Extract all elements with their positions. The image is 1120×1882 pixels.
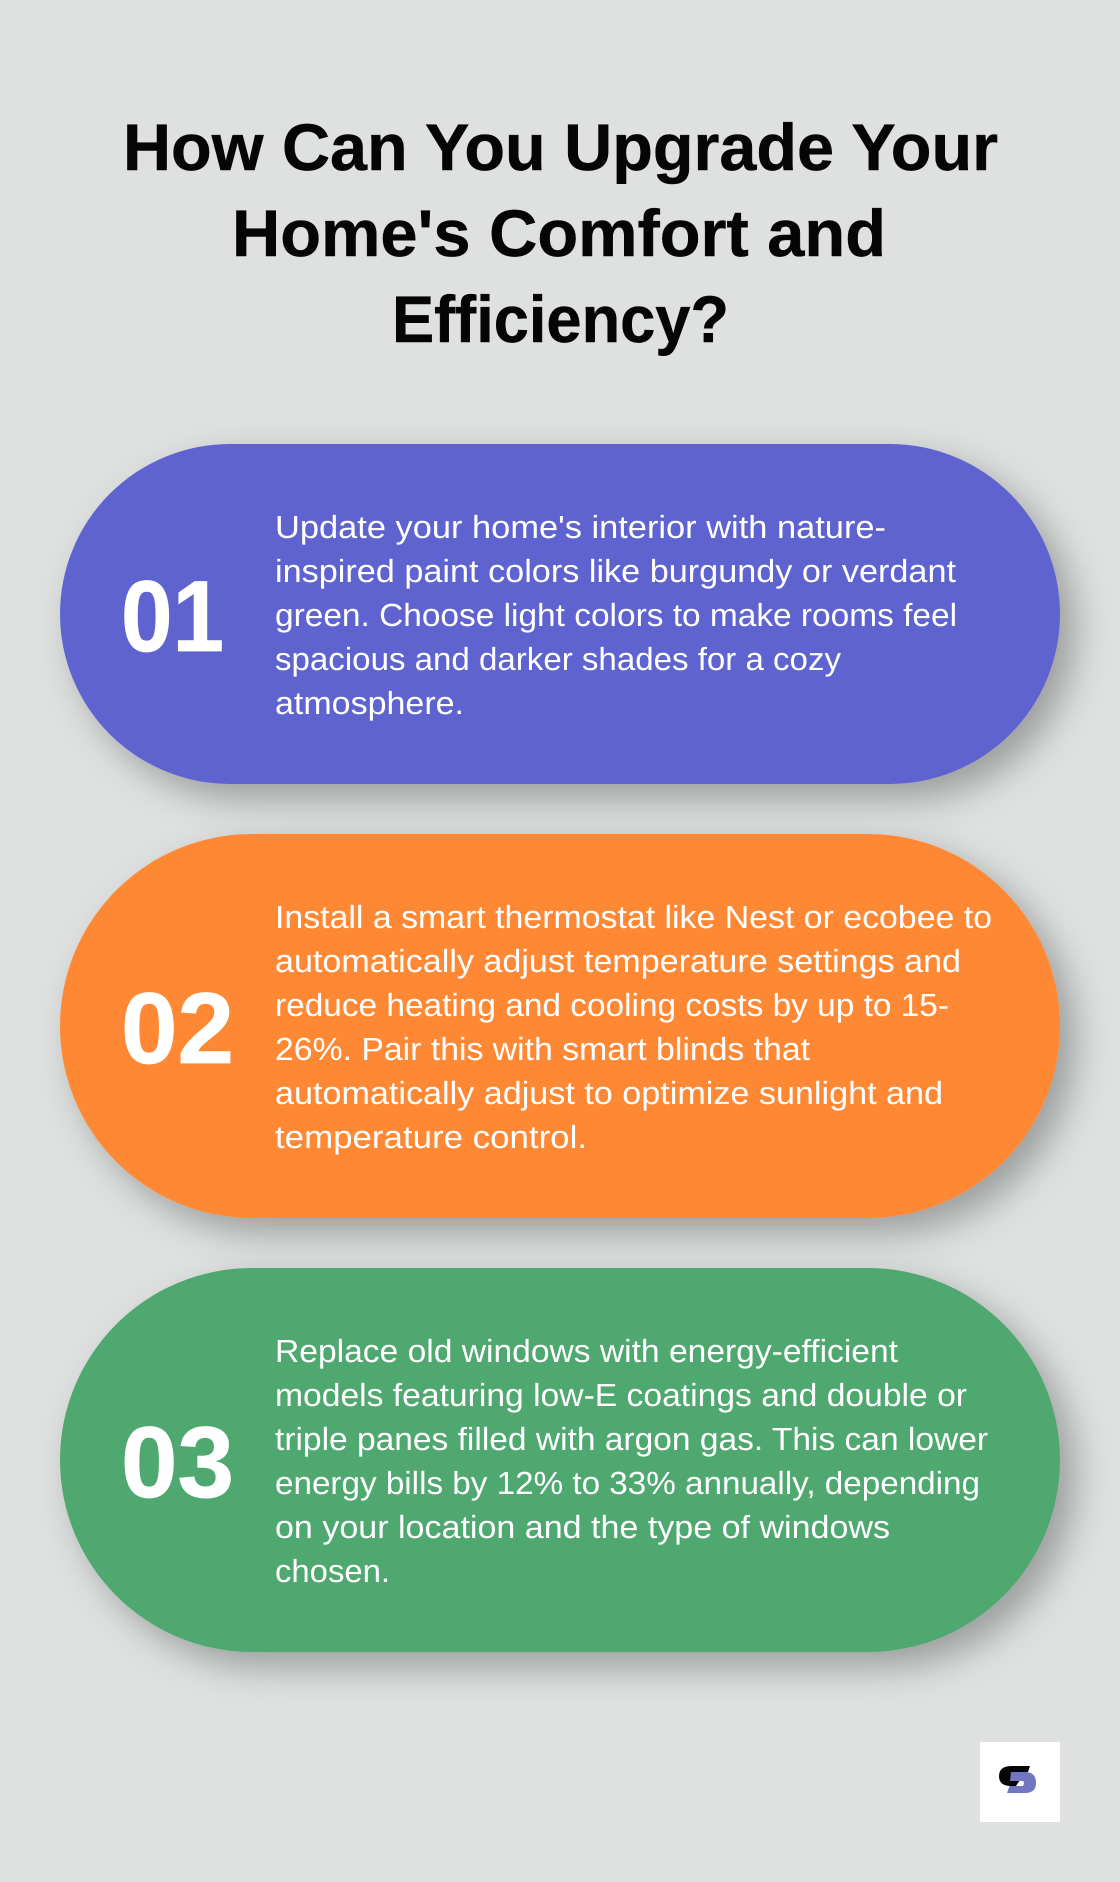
icon: logo badge (980, 1742, 1060, 1822)
body text: automatically adjust temperature settings and (275, 943, 961, 979)
body text: models featuring low-E coatings and double or (275, 1377, 967, 1413)
body text (275, 899, 992, 1155)
step number 01: 01 (121, 561, 224, 673)
body text: Install a smart thermostat like Nest or ecobee to (275, 899, 992, 935)
pill background: orange (60, 834, 1060, 1218)
body text: green. Choose light colors to make rooms feel (275, 597, 957, 633)
body text (275, 1333, 988, 1589)
body text: automatically adjust to optimize sunlight and (275, 1075, 943, 1111)
body text: temperature control. (275, 1119, 587, 1155)
step number 03: 03 (121, 1407, 234, 1519)
body text: on your location and the type of windows (275, 1509, 890, 1545)
title: How Can You Upgrade Your (123, 110, 998, 184)
panel: step 01 paint colors (60, 444, 1060, 784)
panel: step 02 smart thermostat (60, 834, 1060, 1218)
body text: atmosphere. (275, 685, 464, 721)
title: Efficiency? (392, 282, 729, 356)
body text: chosen. (275, 1553, 390, 1589)
panel: step 03 energy-efficient windows (60, 1268, 1060, 1652)
body text: energy bills by 12% to 33% annually, depending (275, 1465, 980, 1501)
body text: Update your home's interior with nature- (275, 509, 886, 545)
body text: 26%. Pair this with smart blinds that (275, 1031, 810, 1067)
pill background: purple (60, 444, 1060, 784)
title: Home's Comfort and (232, 196, 886, 270)
body text: Replace old windows with energy-efficient (275, 1333, 898, 1369)
body text (275, 509, 957, 721)
pill background: green (60, 1268, 1060, 1652)
title (123, 110, 998, 356)
body text: inspired paint colors like burgundy or verdant (275, 553, 956, 589)
body text: reduce heating and cooling costs by up to 15- (275, 987, 949, 1023)
body text: spacious and darker shades for a cozy (275, 641, 841, 677)
step number 02: 02 (121, 973, 234, 1085)
body text: triple panes filled with argon gas. This can lower (275, 1421, 988, 1457)
